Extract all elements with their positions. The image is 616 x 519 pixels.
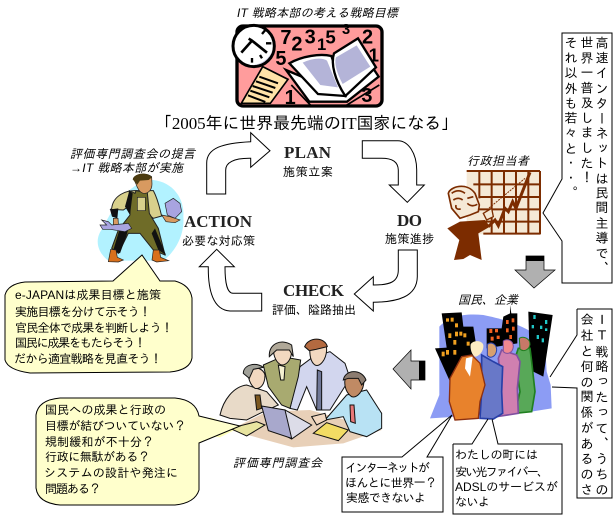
label: CHECK: CHECK [283,281,345,300]
callout: internet remark: インターネットが [345,461,430,475]
caption: committee proposal: →IT 戦略本部が実施 [70,161,185,175]
callout: e-JAPAN proposal: e-JAPANは成果目標と施策 [15,288,161,302]
callout: committee questions: 行政に無駄がある？ [45,450,150,464]
callout: company remark: ＩＴ戦略ったって、うちの [595,313,608,498]
callout: e-JAPAN proposal: 実施目標を分けて示そう！ [15,305,151,319]
label: DO [385,211,434,246]
callout: e-JAPAN proposal [5,255,192,373]
caption: administrator: 行政担当者 [467,154,530,168]
icon: clock, numbers and book: 5 [275,48,286,70]
callout: administrator remark: それ以外も若々と・・。 [564,36,578,201]
callout: committee questions: システムの設計や発注に [44,466,178,480]
arrow: plan to do [362,141,424,202]
callout: committee questions: 目標が結びついていない？ [45,419,186,433]
icon: clock, numbers and book: 3 [342,22,350,38]
icon: man pointing at rising chart [447,171,540,260]
label: PLAN [283,143,333,179]
label: CHECK: 評価、隘路抽出 [272,303,356,317]
icon: clock, numbers and book: 1 [317,35,326,54]
callout: fiber service remark: わたしの町には [455,448,538,462]
icon: clock, numbers and book: 1 [369,45,379,66]
icon: clock, numbers and book: 2 [291,34,302,56]
callout: company remark [550,309,612,498]
heading: strategic goal caption: IT 戦略本部の考える戦略目標 [237,6,400,20]
callout: internet remark [342,415,452,512]
icon: citizens in city [430,305,553,420]
icon: clock, numbers and book: 5 [325,26,336,47]
callout: committee questions: 国民への成果と行政の [45,403,166,417]
arrow: action to plan [207,133,270,194]
label: DO: 施策進捗 [385,232,434,246]
icon: clock, numbers and book: 2 [362,26,373,48]
caption: citizens and companies: 国民、企業 [458,293,520,307]
icon: clock, numbers and book: 3 [305,26,316,48]
label: ACTION: ACTION [184,212,253,231]
icon: committee meeting team [210,339,382,447]
icon: clock, numbers and book [233,22,382,109]
callout: committee questions: 問題ある？ [45,482,101,496]
callout: administrator remark: 世界一普及しました！ [580,36,594,186]
callout: internet remark: ほんとに世界一？ [345,476,437,490]
caption: evaluation committee: 評価専門調査会 [233,456,323,470]
callout: e-JAPAN proposal: 国民に成果をもたらそう！ [15,336,146,350]
label: CHECK [272,281,356,317]
icon: clock, numbers and book: 7 [280,27,291,49]
arrow: check to action [199,249,262,311]
callout: fiber service remark: 安い光ファイバー、 [455,465,549,479]
callout: administrator remark: 高速インターネットは民間主導で、 [595,36,608,276]
arrow: citizens left to committee [393,350,425,389]
callout: e-JAPAN proposal: だから適宜戦略を見直そう！ [14,352,162,366]
label: ACTION [182,212,255,248]
callout: committee questions [36,398,240,505]
caption: committee proposal: 評価専門調査会の提言 [70,147,197,161]
callout: e-JAPAN proposal: 官民全体で成果を判断しよう！ [15,321,173,335]
callout: committee questions: 規制緩和が不十分？ [45,435,154,449]
icon: mechanic [98,174,183,262]
icon: clock, numbers and book: 1 [285,87,296,109]
caption: committee proposal [70,147,197,175]
label: DO: DO [397,211,422,230]
arrow: do to check [354,250,417,311]
title: goal statement: 「2005年に世界最先端のIT国家になる」 [155,114,458,133]
callout: company remark: 会社と何の関係があるのさ [580,313,594,498]
callout: fiber service remark: ないよ [455,495,490,509]
callout: fiber service remark [453,419,562,514]
label: ACTION: 必要な対応策 [182,234,255,248]
label: PLAN: 施策立案 [283,165,333,179]
label: PLAN: PLAN [284,143,332,162]
callout: internet remark: 実感できないよ [346,491,426,505]
callout: administrator remark [543,33,612,283]
icon: clock, numbers and book: 3 [361,85,372,107]
callout: fiber service remark: ADSLのサービスが [455,480,558,494]
arrow: administrator down to citizens [515,256,555,288]
